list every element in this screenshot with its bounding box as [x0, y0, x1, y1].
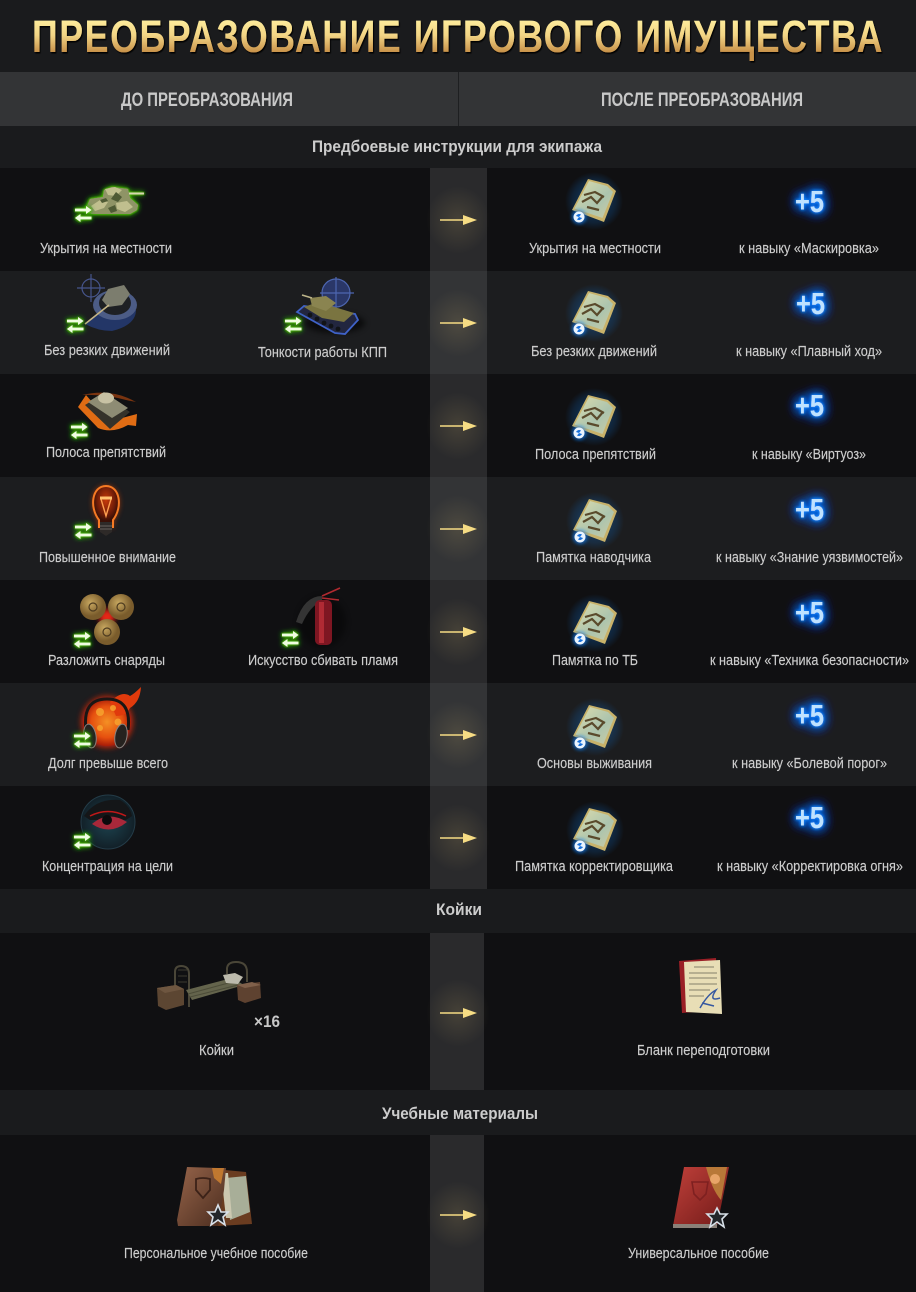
icon: light bulb — [75, 486, 119, 539]
section heading: training materials — [0, 1090, 916, 1135]
label: Основы выживания — [537, 755, 652, 772]
label: Разложить снаряды — [48, 652, 165, 669]
arrow — [426, 979, 490, 1047]
label: Долг превыше всего — [48, 755, 168, 772]
section heading: crew instructions: Предбоевые инструкции для экипажа — [312, 137, 602, 156]
row 5: ammo and fire — [0, 580, 916, 683]
quantity: ×16 — [254, 1012, 280, 1031]
icon: instruction document — [565, 388, 623, 446]
icon: personal manual — [177, 1167, 252, 1226]
arrow — [426, 392, 490, 460]
arrow — [426, 289, 490, 357]
bonus value: +5 — [795, 698, 824, 733]
arrow — [426, 701, 490, 769]
label: Без резких движений — [44, 342, 170, 359]
label: Укрытия на местности — [529, 240, 661, 257]
label: к навыку «Виртуоз» — [752, 446, 866, 463]
page header — [0, 0, 916, 72]
label: Памятка корректировщика — [515, 858, 674, 875]
label: Укрытия на местности — [40, 240, 172, 257]
section heading: training materials: Учебные материалы — [382, 1104, 538, 1123]
icon: universal manual — [673, 1167, 729, 1228]
label: Без резких движений — [531, 343, 657, 360]
arrow — [426, 186, 490, 254]
label: Повышенное внимание — [39, 549, 176, 566]
label: Памятка по ТБ — [552, 652, 638, 669]
arrow — [426, 1181, 490, 1249]
label: к навыку «Плавный ход» — [736, 343, 882, 360]
icon: turret with reticle — [67, 274, 137, 333]
icon: burning headphones — [74, 687, 141, 749]
icon: instruction document — [565, 172, 623, 230]
arrow — [426, 495, 490, 563]
row 2: smooth ride — [0, 271, 916, 374]
bonus value: +5 — [795, 595, 824, 630]
label: Концентрация на цели — [42, 858, 173, 875]
label: к навыку «Маскировка» — [739, 240, 879, 257]
arrow — [426, 804, 490, 872]
section heading: crew instructions — [0, 126, 916, 168]
icon: instruction document — [566, 594, 624, 652]
icon: red eye — [74, 795, 135, 849]
icon: instruction document — [565, 284, 623, 342]
icon: camouflaged tank — [75, 187, 144, 222]
label: Полоса препятствий — [46, 444, 166, 461]
row 1: cover — [0, 168, 916, 271]
row 6: duty first — [0, 683, 916, 786]
icon: fire extinguisher — [282, 588, 346, 648]
label: Полоса препятствий — [535, 446, 656, 463]
icon: instruction document — [566, 698, 624, 756]
bonus value: +5 — [795, 492, 824, 527]
row: training materials conversion — [0, 1135, 916, 1292]
label: Искусство сбивать пламя — [248, 652, 398, 669]
label: Памятка наводчика — [536, 549, 652, 566]
bonus value: +5 — [795, 388, 824, 423]
section heading: bunks: Койки — [436, 900, 482, 919]
column headers — [0, 72, 916, 126]
bonus value: +5 — [795, 800, 824, 835]
column heading: after: ПОСЛЕ ПРЕОБРАЗОВАНИЯ — [601, 90, 803, 111]
arrow — [426, 598, 490, 666]
icon: three shells — [74, 594, 134, 648]
row 3: obstacle course — [0, 374, 916, 477]
label: Койки — [199, 1042, 234, 1059]
column heading: before: ДО ПРЕОБРАЗОВАНИЯ — [121, 90, 293, 111]
icon: tank with reticle — [285, 277, 365, 334]
bonus value: +5 — [796, 286, 825, 321]
icon: retraining form — [679, 958, 722, 1014]
section heading: bunks — [0, 889, 916, 933]
label: к навыку «Болевой порог» — [732, 755, 887, 772]
label: Бланк переподготовки — [637, 1042, 770, 1059]
icon: bed with bedside boxes — [157, 962, 261, 1010]
row 7: target focus — [0, 786, 916, 889]
label: Универсальное пособие — [628, 1245, 769, 1262]
icon: instruction document — [566, 801, 624, 859]
row: bunks conversion — [0, 933, 916, 1090]
icon: instruction document — [566, 492, 624, 550]
label: Персональное учебное пособие — [124, 1245, 308, 1262]
bonus value: +5 — [795, 184, 824, 219]
row 4: heightened attention — [0, 477, 916, 580]
label: Тонкости работы КПП — [258, 344, 387, 361]
icon: tank on orange track — [71, 392, 137, 439]
